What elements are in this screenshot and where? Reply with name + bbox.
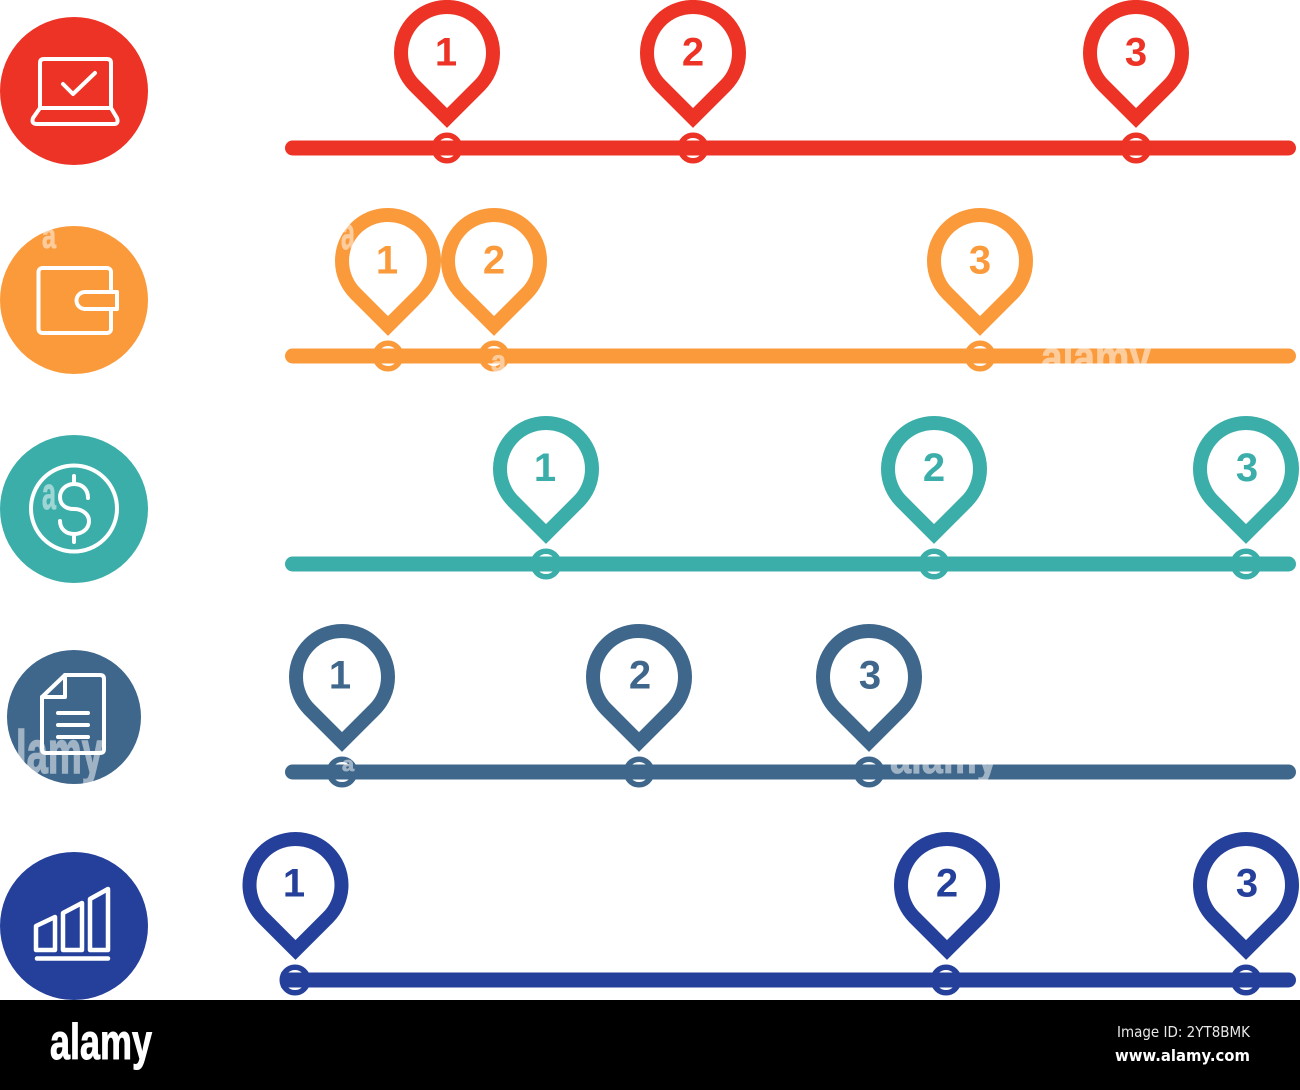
marker group 3: 3 <box>1236 446 1258 490</box>
icon: bar chart <box>0 852 148 1000</box>
row 1: red timeline <box>0 7 1296 165</box>
marker group 3: 3 <box>969 238 991 282</box>
marker group 3: 3 <box>1236 862 1258 906</box>
marker group 2 <box>647 7 739 161</box>
marker group 1: a <box>341 208 356 259</box>
marker group 1 <box>249 839 341 993</box>
marker group 2: 2 <box>936 862 958 906</box>
icon: document <box>7 650 141 786</box>
marker group 2 <box>593 631 685 785</box>
watermark on line: alamy <box>890 731 998 783</box>
marker group 3 <box>1200 839 1292 993</box>
marker group 3: 3 <box>1125 30 1147 74</box>
marker group 3 <box>1090 7 1182 161</box>
marker group 2: 2 <box>923 446 945 490</box>
timeline line <box>285 140 1296 156</box>
logo: alamy: alamy <box>50 1014 152 1070</box>
icon: document: lamy <box>16 719 103 786</box>
marker group 2: 2 <box>682 30 704 74</box>
watermark on line: alamy <box>1041 331 1151 383</box>
row 4: slate timeline <box>7 631 1296 786</box>
marker group 3 <box>1200 423 1292 577</box>
marker group 2 <box>888 423 980 577</box>
marker group 2 <box>901 839 993 993</box>
marker group 3: 3 <box>859 654 881 698</box>
icon: dollar coin <box>0 435 148 583</box>
website: www.alamy.com <box>1115 1046 1250 1065</box>
marker group 2: a <box>491 345 506 378</box>
icon: wallet: a <box>42 215 57 256</box>
row 5: navy timeline <box>0 839 1296 1000</box>
marker group 1: 1 <box>435 30 457 74</box>
timeline line <box>285 764 1296 780</box>
marker group 1 <box>500 423 592 577</box>
marker group 2: 2 <box>629 654 651 698</box>
timeline line <box>285 972 1296 988</box>
timeline line <box>285 556 1296 572</box>
marker group 1: 1 <box>329 654 351 698</box>
marker group 2: 2 <box>483 238 505 282</box>
marker group 1: 1 <box>283 862 305 906</box>
marker group 1 <box>296 631 388 785</box>
timeline line <box>285 348 1296 364</box>
marker group 1: 1 <box>534 446 556 490</box>
marker group 1: 1 <box>376 238 398 282</box>
marker group 3 <box>934 215 1026 369</box>
icon: dollar coin: a <box>42 468 57 519</box>
marker group 1 <box>341 208 434 369</box>
row 3: teal timeline <box>0 423 1296 583</box>
marker group 1: a <box>342 754 355 776</box>
icon: laptop with check mark <box>0 17 148 165</box>
icon: wallet <box>0 215 148 374</box>
marker group 2 <box>448 215 540 378</box>
marker group 3 <box>823 631 915 785</box>
footer band <box>0 1000 1300 1090</box>
marker group 1 <box>401 7 493 161</box>
image id: Image ID: 2YT8BMK <box>1117 1023 1251 1041</box>
row 2: orange timeline <box>0 208 1296 383</box>
